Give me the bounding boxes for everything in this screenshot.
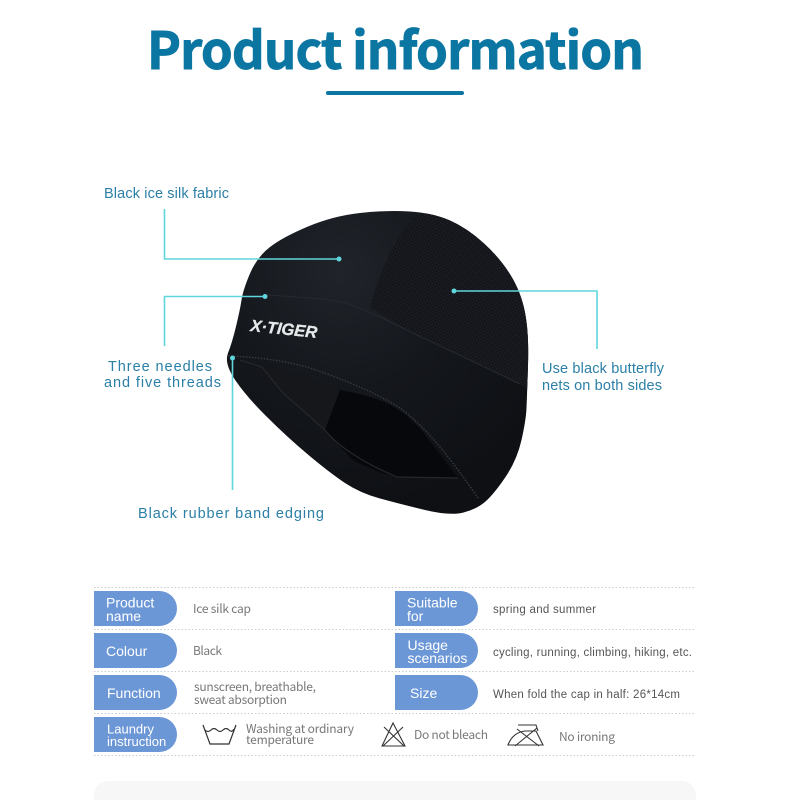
- row: size: [395, 675, 680, 710]
- row: suitable for: Suitable: [407, 594, 458, 610]
- row: laundry instruction: Laundry: [107, 722, 154, 736]
- row: function: [94, 675, 316, 710]
- row: suitable for: for: [407, 608, 424, 624]
- title: Product information: [147, 10, 644, 84]
- row: usage scenarios: cycling, running, climbing, hiking, etc.: [493, 647, 692, 659]
- brand logo: X·TIGER: [249, 317, 318, 342]
- text: washing: temperature: [246, 731, 314, 748]
- row: suitable for: spring and summer: [493, 604, 596, 616]
- row: usage scenarios: [395, 633, 692, 668]
- bottom panel: [94, 781, 696, 800]
- row: usage scenarios: scenarios: [408, 650, 467, 666]
- callout: black ice silk fabric: Black ice silk fabric: [104, 186, 229, 202]
- cap opening: [325, 390, 458, 478]
- row: function: sweat absorption: [194, 691, 287, 708]
- row: product name: [94, 591, 251, 626]
- title underline: [326, 91, 464, 95]
- stitched band seam: [267, 295, 520, 384]
- row: function: Function: [107, 685, 161, 701]
- callout: black ice silk fabric: [104, 186, 342, 262]
- spec table: [94, 591, 692, 752]
- callout: black butterfly nets: [452, 288, 665, 394]
- callout: three needles and five threads: and five threads: [104, 375, 221, 391]
- row: product name: Product: [106, 594, 154, 610]
- row: laundry instruction: [94, 717, 177, 752]
- icon: wash basin: [203, 725, 236, 744]
- callout: three needles and five threads: Three needles: [108, 359, 212, 375]
- mesh side panel: [370, 213, 528, 389]
- text: do not bleach: Do not bleach: [414, 726, 488, 743]
- row: laundry instruction: instruction: [107, 734, 166, 749]
- row: size: When fold the cap in half: 26*14cm: [493, 689, 680, 701]
- callout: black rubber band edging: [138, 356, 324, 522]
- row: size: Size: [410, 685, 437, 701]
- text: washing: [246, 720, 355, 748]
- row: suitable for: [395, 591, 596, 626]
- row: colour: Colour: [106, 643, 148, 659]
- row: function: sunscreen, breathable,: [194, 678, 316, 695]
- inner ear mesh flap: [262, 367, 340, 430]
- callout: black butterfly nets: Use black butterfly: [542, 361, 665, 377]
- row: product name: name: [106, 608, 141, 624]
- row: colour: [94, 633, 222, 668]
- product photo: cap: [227, 205, 540, 514]
- icon: do not bleach: [382, 723, 405, 746]
- text: washing: Washing at ordinary: [246, 720, 355, 737]
- row: product name: Ice silk cap: [193, 600, 251, 617]
- row: usage scenarios: Usage: [408, 637, 448, 653]
- text: no ironing: No ironing: [559, 728, 615, 745]
- cap body: [227, 211, 528, 514]
- icon: no ironing: [508, 725, 543, 746]
- callout: three needles and five threads: [104, 294, 268, 391]
- callout: black rubber band edging: Black rubber band edging: [138, 506, 324, 522]
- callout: black butterfly nets: nets on both sides: [542, 378, 662, 394]
- stitched edge: [228, 356, 478, 498]
- row: colour: Black: [193, 642, 222, 659]
